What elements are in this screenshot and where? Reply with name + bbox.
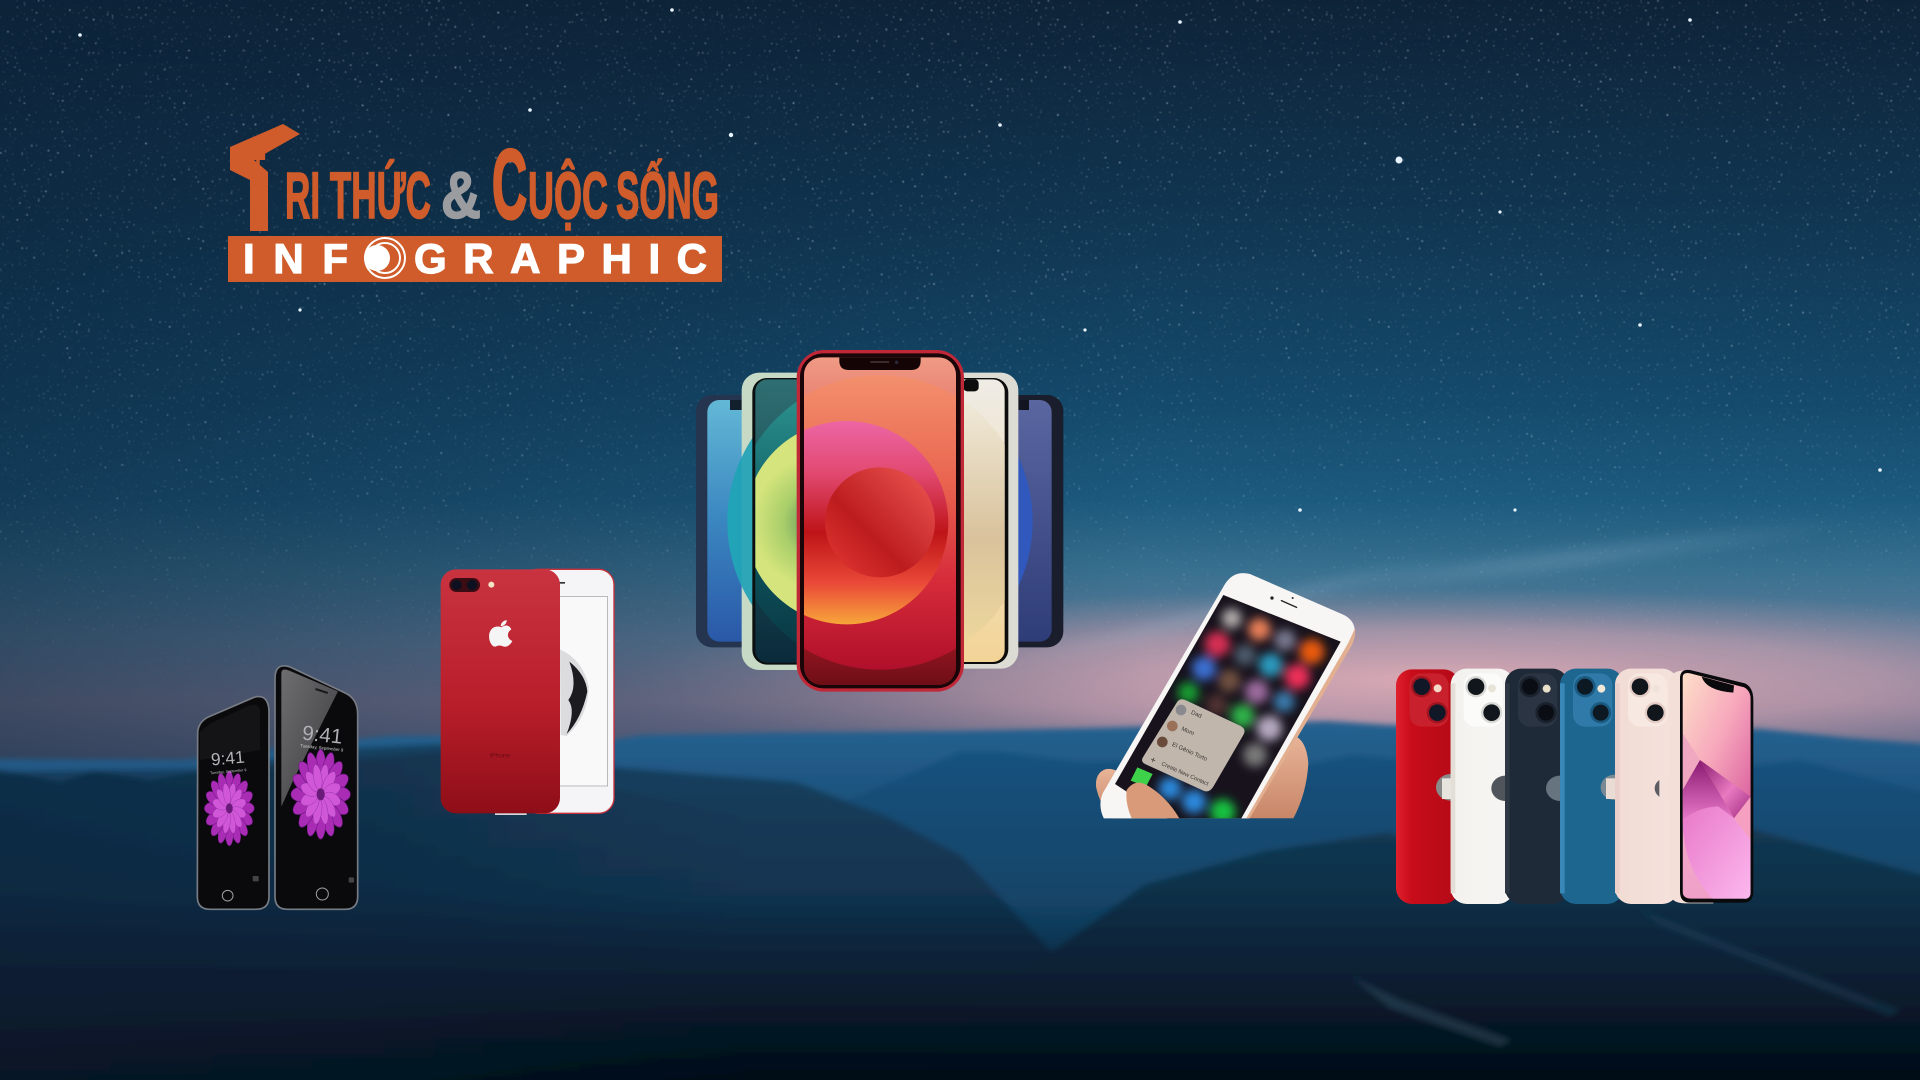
3D Touch quick action card: Dad [1190, 710, 1202, 720]
blue iPhone 13 [1560, 669, 1629, 904]
3D Touch quick action card: Mom [1180, 726, 1195, 737]
white iPhone 12 [964, 372, 1018, 669]
logo heading text [230, 119, 719, 256]
white front iPhone 7 Plus [523, 569, 614, 813]
icon: Apple logo [489, 620, 512, 647]
pink iPhone 13 [1615, 669, 1683, 904]
logo heading text: & [441, 158, 481, 232]
logo heading text: SỐNG [616, 158, 719, 232]
iPhone 6 small [197, 697, 269, 909]
logo heading text: UỘC [528, 158, 608, 232]
red iPhone 7 Plus back: iPhone [490, 752, 511, 759]
3D Touch quick action card: El Gênio Torto [1171, 742, 1208, 763]
phone app icon and thumb [1126, 767, 1179, 818]
hand behind phone [1240, 735, 1308, 818]
logo heading text: C [492, 129, 527, 239]
phone body [1100, 573, 1355, 823]
front pink iPhone 13 with screen [1669, 670, 1755, 903]
iPhone 6 Plus large: 9:41 [301, 722, 344, 749]
3D Touch quick action card [1142, 699, 1245, 791]
iPhone 12 colour line-up [696, 350, 1063, 692]
logo heading text: RI THỨC [285, 158, 431, 232]
3D Touch quick action card: + [1149, 754, 1158, 766]
iPhone 6 pair and red iPhone 7 Plus [197, 569, 614, 909]
iPhone 6 small: Tuesday, September 9 [210, 768, 247, 775]
hand holding iPhone 6s with 3D Touch menu [1096, 573, 1355, 827]
iPhone 13 colour line-up [1396, 669, 1755, 904]
red iPhone 13 [1396, 669, 1465, 904]
logo infographic bar: GRAPHIC [414, 235, 707, 282]
white iPhone 13 [1451, 669, 1519, 904]
phone screen with blurred apps [1115, 595, 1341, 827]
logo: Tri Thức & Cuộc Sống Infographic [228, 119, 722, 282]
red iPhone 12 [796, 350, 964, 692]
green iPhone 12 [728, 372, 798, 670]
3D Touch quick action card: Create New Contact [1160, 761, 1210, 788]
red iPhone 7 Plus back [441, 569, 560, 815]
iPhone 6 small: 9:41 [210, 747, 245, 769]
navy iPhone 12 right [1018, 395, 1064, 648]
iPhone 6 Plus large [275, 666, 358, 909]
phone speaker and camera [1270, 596, 1297, 608]
blue iPhone 12 left [696, 395, 742, 648]
logo infographic bar: INF [243, 235, 348, 282]
logo infographic bar [228, 235, 722, 282]
iPhone 6 Plus large: Tuesday, September 9 [300, 743, 344, 753]
midnight iPhone 13 [1505, 669, 1574, 904]
logo heading text: T [251, 119, 265, 256]
